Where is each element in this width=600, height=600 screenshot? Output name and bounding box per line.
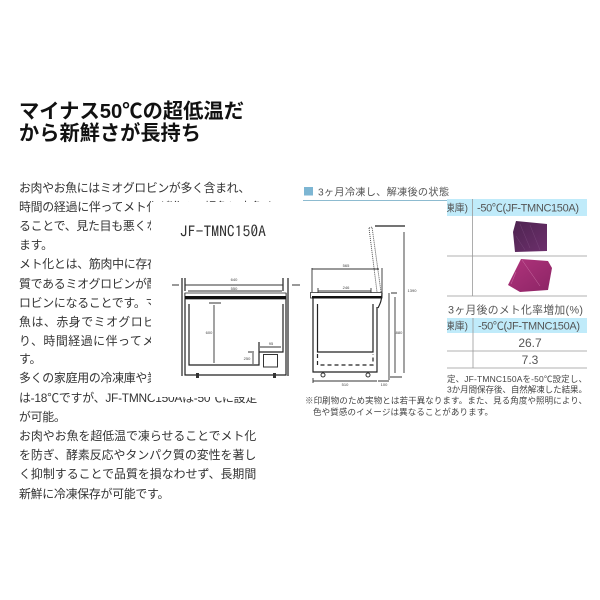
front view drawing: 600 bbox=[206, 330, 213, 335]
body text: 多くの家庭用の冷凍庫や業務用の冷凍庫の設定 bbox=[19, 371, 264, 385]
front view drawing: 550 bbox=[231, 286, 238, 291]
body text: 魚は、赤身でミオグロビンが多く含まれてお bbox=[19, 315, 267, 329]
footnote: ※印刷物のため実物とは若干異なります。また、見る角度や照明により、 bbox=[305, 396, 587, 406]
side view drawing: 565 bbox=[343, 263, 350, 268]
footnote bbox=[305, 374, 587, 417]
body text: り、時間経過に伴ってメト化が進行しま bbox=[19, 334, 242, 348]
title: マイナス50℃の超低温だ bbox=[19, 100, 244, 123]
footnote: 3か月間保存後、自然解凍した結果。 bbox=[447, 384, 587, 394]
title bbox=[19, 100, 244, 145]
body text: は-18℃ですが、JF-TMNC150Aは-50℃に設定 bbox=[19, 391, 257, 405]
body text: が可能。 bbox=[19, 410, 66, 424]
body text: 時間の経過に伴ってメト化が進み、褐色に変色す bbox=[19, 200, 275, 214]
heading: state after thawing: 3ヶ月冷凍し、解凍後の状態 bbox=[318, 186, 449, 198]
photo: meat frozen at -50C, top bbox=[513, 221, 547, 252]
body text: ることで、見た目も悪くなり、味も落ちてしまい bbox=[19, 219, 274, 233]
side view drawing bbox=[310, 226, 417, 387]
body text: ます。 bbox=[19, 238, 53, 252]
front view drawing bbox=[172, 277, 300, 378]
white panel covering drawings area bbox=[151, 202, 447, 397]
footnote: 色や質感のイメージは異なることがあります。 bbox=[313, 407, 493, 417]
table: metmyoglobin rate: 凍庫) bbox=[445, 320, 468, 332]
side view drawing: 880 bbox=[396, 330, 403, 335]
body text: を防ぎ、酵素反応やタンパク質の変性を著し bbox=[19, 448, 256, 462]
table: state after thawing: -50℃(JF-TMNC150A) bbox=[477, 202, 579, 214]
body text: く抑制することで品質を損なわせず、長期間 bbox=[19, 467, 256, 481]
heading: metmyoglobin rate: 3ヶ月後のメト化率増加(%) bbox=[448, 302, 583, 316]
heading: state after thawing bbox=[303, 186, 449, 201]
footnote: 定、JF-TMNC150Aを-50℃設定し、 bbox=[447, 374, 587, 384]
side view drawing: 246 bbox=[343, 285, 350, 290]
front view drawing: 640 bbox=[231, 277, 238, 282]
table: metmyoglobin rate: 7.3 bbox=[522, 353, 539, 367]
front view drawing: 250 bbox=[244, 356, 251, 361]
side view drawing: 510 bbox=[342, 382, 349, 387]
table: metmyoglobin rate bbox=[445, 318, 587, 368]
body text: お肉やお魚を超低温で凍らせることでメト化 bbox=[19, 429, 256, 443]
body text bbox=[19, 181, 275, 501]
table: metmyoglobin rate: -50℃(JF-TMNC150A) bbox=[478, 320, 580, 332]
body text: メト化とは、筋肉中に存在する色素タンパク bbox=[19, 257, 252, 271]
table: state after thawing: 凍庫) bbox=[445, 202, 468, 214]
body text: ロビンになることです。マグロなどの bbox=[19, 296, 215, 310]
table: metmyoglobin rate: 26.7 bbox=[518, 336, 542, 350]
title: から新鮮さが長持ち bbox=[19, 121, 201, 145]
body text: す。 bbox=[19, 352, 41, 366]
front view drawing: 95 bbox=[269, 341, 274, 346]
side view drawing: 100 bbox=[381, 382, 388, 387]
photo: meat frozen at -50C, bottom bbox=[508, 259, 552, 292]
table: state after thawing bbox=[445, 199, 587, 296]
body text: 新鮮に冷凍保存が可能です。 bbox=[19, 487, 169, 501]
side view drawing: 1390 bbox=[408, 288, 417, 293]
body text: 質であるミオグロビンが酸化され、メトミオグ bbox=[19, 277, 263, 291]
body text: お肉やお魚にはミオグロビンが多く含まれ、 bbox=[19, 181, 250, 195]
model name: JF-TMNC150A bbox=[180, 223, 266, 239]
